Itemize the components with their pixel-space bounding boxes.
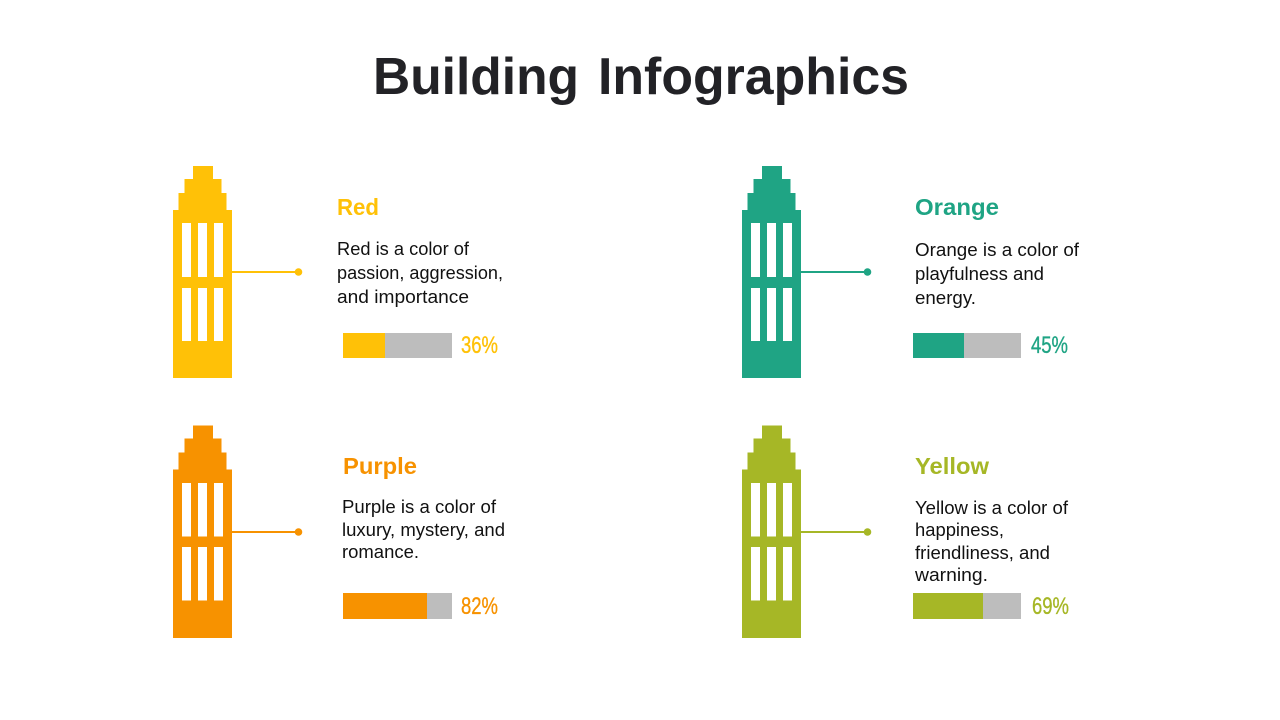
title: Building — [373, 48, 579, 106]
description — [915, 239, 1080, 308]
description: friendliness, and — [915, 542, 1050, 563]
value: 45%: 45% — [1031, 332, 1068, 359]
progress bar 36% — [343, 333, 452, 358]
description — [914, 497, 1069, 585]
heading: Red: Red — [337, 194, 379, 220]
description: warning. — [914, 564, 988, 585]
icon: green building — [742, 166, 801, 378]
heading: Purple: Purple — [343, 453, 417, 479]
description: Orange is a color of — [915, 239, 1080, 260]
description: romance. — [342, 541, 419, 562]
description: luxury, mystery, and — [342, 519, 505, 540]
panel: Yellow — [742, 426, 1069, 638]
value: 36%: 36% — [461, 332, 498, 359]
connector line — [232, 528, 302, 536]
progress bar 69% — [913, 593, 1021, 619]
description: Purple is a color of — [342, 496, 497, 517]
description: passion, aggression, — [337, 262, 503, 283]
value: 82%: 82% — [461, 593, 498, 620]
connector line — [801, 268, 871, 276]
description: Red is a color of — [337, 238, 470, 259]
value: 69%: 69% — [1032, 593, 1069, 620]
icon: orange building — [173, 426, 232, 638]
icon: olive building — [742, 426, 801, 638]
connector line — [232, 268, 302, 276]
description — [342, 496, 505, 562]
description — [337, 238, 503, 307]
description: Yellow is a color of — [915, 497, 1069, 518]
panel: Red — [173, 166, 503, 378]
description: energy. — [915, 287, 976, 308]
heading: Yellow: Yellow — [915, 453, 989, 479]
panel: Purple — [173, 426, 505, 638]
heading: Orange: Orange — [915, 194, 999, 220]
title: Infographics — [598, 48, 909, 106]
progress bar 82% — [343, 593, 452, 619]
panel: Orange — [742, 166, 1080, 378]
progress bar 45% — [913, 333, 1021, 358]
icon: yellow building — [173, 166, 232, 378]
connector line — [801, 528, 871, 536]
description: playfulness and — [915, 263, 1044, 284]
description: happiness, — [915, 519, 1004, 540]
title — [373, 48, 909, 106]
description: and importance — [337, 286, 469, 307]
